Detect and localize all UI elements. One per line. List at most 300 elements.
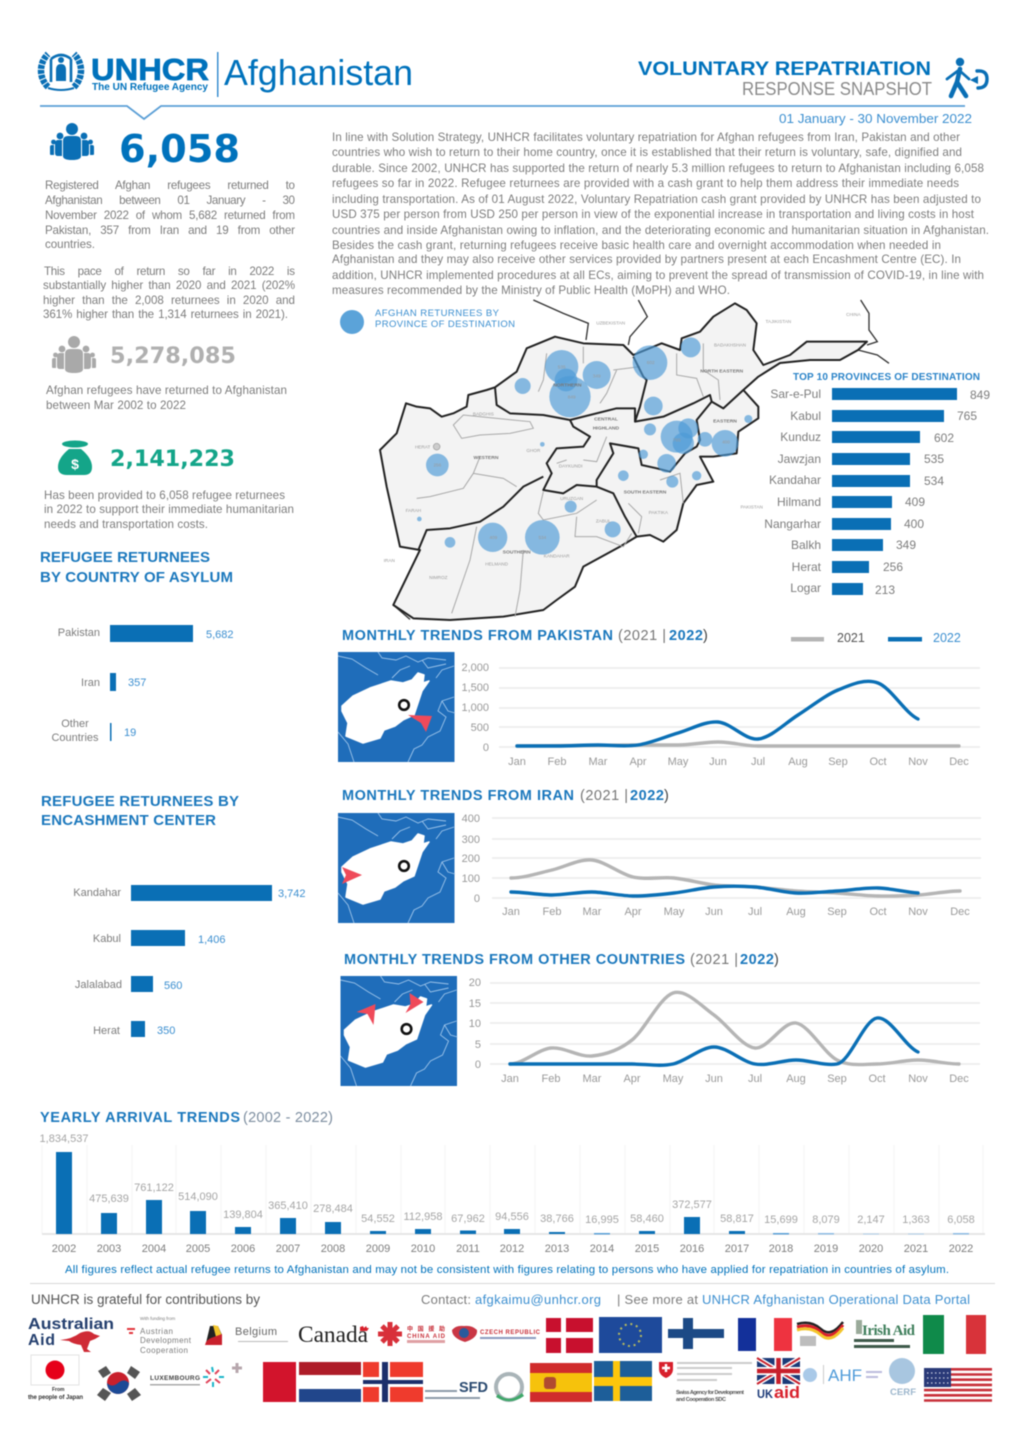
- bar: Kandahar: 3,742: [278, 888, 306, 900]
- value labels: 54,552: [361, 1213, 395, 1225]
- chart: Iran line chart: [462, 813, 981, 918]
- logo: Germany: [797, 1322, 843, 1346]
- chart: other countries line chart: Aug: [786, 1073, 806, 1085]
- chart: other countries line chart: Apr: [623, 1073, 641, 1085]
- map labels: 409: [489, 535, 498, 540]
- stat: 5,278,085 total returned: [46, 336, 287, 412]
- chart: Iran line chart: 0: [474, 893, 480, 905]
- logo: Czech Republic: CZECH REPUBLIC: [480, 1330, 541, 1336]
- panel: returnees by encashment center: [41, 793, 306, 1037]
- value labels: 58,817: [720, 1213, 754, 1225]
- chart: Iran line chart: Mar: [583, 906, 602, 918]
- logo: Austrian Development Cooperation: Development: [140, 1336, 192, 1345]
- text block: introduction: addition, UNHCR implemented procedures at all ECs, aiming to prevent the spread of transmission of COVID-19, in line with: [332, 269, 984, 282]
- year labels: 2018: [769, 1243, 793, 1255]
- logo: Japan: [28, 1355, 83, 1401]
- logo: Luxembourg: [150, 1367, 224, 1387]
- chart: Pakistan line chart: Apr: [629, 756, 647, 768]
- value labels: 1,363: [902, 1214, 930, 1226]
- report title: VOLUNTARY REPATRIATION: [638, 58, 931, 80]
- legend: 2021: [837, 631, 865, 645]
- values: 765: [957, 409, 977, 423]
- logo: Belgium: Belgium: [235, 1326, 277, 1338]
- province labels: Kandahar: [769, 473, 821, 487]
- bar: Herat: 350: [157, 1025, 175, 1037]
- heading: MONTHLY TRENDS FROM OTHER COUNTRIES: [344, 952, 685, 968]
- heading: YEARLY ARRIVAL TRENDS: [40, 1110, 240, 1126]
- chart: other countries line chart: Dec: [949, 1073, 969, 1085]
- date: 01 January - 30 November 2022: [779, 111, 972, 126]
- map: Iran route: [338, 813, 455, 923]
- value labels: 761,122: [134, 1182, 174, 1194]
- chart: Pakistan line chart: May: [668, 756, 689, 768]
- flag: Sweden: [594, 1361, 652, 1401]
- stat: 6,058 returnees: 6,058: [119, 127, 240, 171]
- chart: top 10 provinces of destination: [764, 372, 990, 597]
- values: 349: [896, 538, 916, 552]
- text block: introduction: including transportation. As of 01 August 2022, Voluntary Repatriation cash grant provided by UNHCR has been adjusted to: [332, 193, 981, 206]
- legend: map bubbles: AFGHAN RETURNEES BY: [375, 308, 500, 319]
- map labels: NIMROZ: [429, 575, 448, 580]
- chart: Iran line chart: Sep: [827, 906, 847, 918]
- value labels: 372,577: [672, 1199, 712, 1211]
- chart: Iran line chart: Jun: [705, 906, 723, 918]
- logo: China Aid: 中国援助: [407, 1325, 445, 1333]
- values: 213: [875, 583, 895, 597]
- logo wordmark: The UN Refugee Agency: [92, 82, 208, 93]
- value labels: 2,147: [857, 1214, 885, 1226]
- stat: 2,141,223 cash: Has been provided to 6,058 refugee returnees: [44, 489, 285, 502]
- chart: Pakistan line chart: Nov: [908, 756, 928, 768]
- chart: other countries line chart: 5: [475, 1039, 481, 1051]
- text block: introduction: countries who wish to return to their home country, once it is established that their return is voluntary, safe, dignified and: [332, 146, 962, 159]
- bar: Herat: Herat: [93, 1025, 120, 1037]
- province labels: Balkh: [791, 538, 821, 552]
- bar: Pakistan: Pakistan: [58, 627, 100, 639]
- chart: Iran line chart: Feb: [543, 906, 561, 918]
- chart: Pakistan line chart: 1,500: [461, 682, 489, 694]
- map labels: CENTRAL: [594, 417, 618, 423]
- chart: other countries line chart: Mar: [583, 1073, 602, 1085]
- stat: 2,141,223 cash: needs and transportation costs.: [44, 518, 208, 531]
- heading: (2021 |: [618, 628, 666, 644]
- text block: introduction: [332, 131, 989, 297]
- chart: other countries line chart: 15: [469, 998, 481, 1010]
- map labels: 849: [568, 394, 576, 399]
- province labels: Kabul: [790, 409, 821, 423]
- text block: introduction: countries and inside Afghanistan owing to inflation, and the deteriorating economic and humanitarian situation in Afghanistan.: [332, 224, 989, 237]
- map labels: UZBEKISTAN: [596, 321, 625, 326]
- map labels: BADGHIS: [473, 412, 494, 417]
- stat: 2,141,223 cash: 2,141,223: [110, 446, 235, 472]
- text block: registered returnees: November 2022 of whom 5,682 returned from: [45, 209, 295, 222]
- bar: Iran: Iran: [81, 677, 100, 689]
- heading: ): [664, 788, 669, 804]
- chart: Iran line chart: 200: [462, 853, 480, 865]
- values: 602: [934, 431, 954, 445]
- heading: 2022: [669, 628, 703, 644]
- province labels: Logar: [790, 581, 821, 595]
- chart: Pakistan line chart: Aug: [788, 756, 808, 768]
- map labels: 256: [433, 463, 442, 468]
- text block: registered returnees: higher than the 2,008 returnees in 2020 and: [43, 294, 295, 307]
- note: All figures reflect actual refugee returns to Afghanistan and may not be consistent with figures relating to persons who have applied for repatriation in countries of asylum.: [65, 1264, 949, 1276]
- value labels: 15,699: [764, 1214, 798, 1226]
- panel: yearly arrival trends: [40, 1110, 985, 1276]
- year labels: 2009: [366, 1243, 390, 1255]
- year labels: 2020: [859, 1243, 883, 1255]
- value labels: 8,079: [812, 1214, 840, 1226]
- logo: Australian Aid: Aid: [28, 1332, 55, 1349]
- province boundaries: [417, 343, 720, 617]
- heading: REFUGEE RETURNEES: [40, 549, 210, 566]
- chart: Pakistan line chart: Feb: [548, 756, 566, 768]
- year labels: 2019: [814, 1243, 838, 1255]
- heading: (2021 |: [580, 788, 628, 804]
- bars: [832, 388, 957, 595]
- heading: ): [703, 628, 708, 644]
- logo: Austrian Development Cooperation: With funding from: [140, 1316, 176, 1321]
- chart: Iran line chart: Aug: [786, 906, 806, 918]
- text block: registered returnees: Afghanistan between 01 January - 30: [45, 194, 295, 207]
- legend: 2022: [933, 631, 961, 645]
- values: 535: [924, 452, 944, 466]
- year labels: [52, 1243, 973, 1255]
- icon: UNHCR emblem: [41, 54, 81, 90]
- chart: other countries line chart: Jul: [748, 1073, 762, 1085]
- panel: monthly trends from other countries: [340, 952, 980, 1086]
- flag: Netherlands: [299, 1362, 361, 1402]
- stat: 5,278,085 total returned: between Mar 2002 to 2022: [46, 399, 186, 412]
- logo: Austrian Development Cooperation: Cooperation: [140, 1346, 188, 1355]
- year labels: 2015: [635, 1243, 659, 1255]
- text block: introduction: In line with Solution Strategy, UNHCR facilitates voluntary repatriation for Afghan refugees from Iran, Pakistan and other: [332, 131, 960, 144]
- chart: Iran line chart: Dec: [950, 906, 970, 918]
- chart: other countries line chart: 10: [469, 1018, 481, 1030]
- chart: Pakistan line chart: Jan: [508, 756, 526, 768]
- map labels: KANDAHAR: [544, 553, 570, 558]
- map labels: 602: [647, 360, 655, 365]
- bar: Kandahar: [73, 885, 306, 901]
- logo: Malta: [232, 1363, 242, 1373]
- text block: registered returnees: Registered Afghan refugees returned to: [45, 179, 295, 192]
- bar chart: yearly arrivals: [40, 1133, 985, 1255]
- value labels: 1,834,537: [40, 1133, 88, 1145]
- map labels: HERAT: [415, 444, 431, 449]
- flag: United States: [924, 1368, 992, 1402]
- province labels: Kunduz: [780, 430, 821, 444]
- chart: other countries line chart: Jun: [705, 1073, 723, 1085]
- logo: China Aid: [378, 1322, 446, 1346]
- header: [40, 52, 987, 126]
- icon: people grey: [52, 336, 96, 373]
- map labels: SOUTHERN: [503, 549, 531, 555]
- text block: registered returnees: [43, 179, 295, 321]
- value labels: 112,958: [404, 1211, 442, 1223]
- stat: 2,141,223 cash: [44, 440, 294, 531]
- chart: Pakistan line chart: 0: [483, 742, 489, 754]
- year labels: 2017: [725, 1243, 749, 1255]
- chart: Pakistan line chart: Jun: [709, 756, 727, 768]
- heading: MONTHLY TRENDS FROM PAKISTAN: [342, 628, 613, 644]
- chart: other countries line chart: 0: [475, 1059, 481, 1071]
- chart: Pakistan line chart: Mar: [589, 756, 608, 768]
- logo wordmark: UNHCR: [91, 52, 209, 87]
- panel: returnees by country of asylum: [40, 549, 234, 744]
- map labels: NORTH EASTERN: [700, 369, 744, 375]
- value labels: 139,804: [223, 1209, 263, 1221]
- map labels: HIGHLAND: [593, 425, 620, 431]
- chart: Iran line chart: 300: [462, 834, 480, 846]
- province labels: Hilmand: [777, 495, 821, 509]
- map labels: URUZGAN: [560, 496, 583, 501]
- map labels: IRAN: [384, 558, 395, 563]
- chart: Pakistan line chart: 1,000: [461, 702, 489, 714]
- bar: Jalalabad: [75, 976, 182, 992]
- chart: Pakistan line chart: Sep: [828, 756, 848, 768]
- panel: monthly trends from Pakistan: [338, 628, 980, 768]
- heading: TOP 10 PROVINCES OF DESTINATION: [793, 372, 980, 383]
- bar: Other countries: [51, 718, 136, 744]
- logo: Austrian Development Cooperation: Austrian: [140, 1327, 173, 1336]
- chart: Iran line chart: 100: [462, 873, 480, 885]
- flag: Norway: [363, 1362, 423, 1402]
- text block: introduction: Besides the cash grant, returning refugees receive basic health care and overnight accommodation when needed in: [332, 239, 941, 252]
- map labels: PAKTIKA: [649, 510, 669, 515]
- report title: RESPONSE SNAPSHOT: [742, 79, 932, 99]
- region boundaries: [418, 357, 743, 550]
- footer text: | See more at: [617, 1292, 698, 1307]
- bar: Kabul: [93, 930, 226, 946]
- flag: Finland: [668, 1318, 724, 1349]
- logo: Swiss Agency for Development: [659, 1362, 752, 1403]
- legend: map bubbles: PROVINCE OF DESTINATION: [375, 319, 515, 330]
- logo: UN AHF: [803, 1365, 882, 1385]
- map labels: 534: [538, 535, 547, 540]
- bar: Other countries: Countries: [51, 732, 99, 744]
- country title: Afghanistan: [224, 52, 413, 93]
- map labels: PAKISTAN: [740, 505, 763, 510]
- chart: other countries line chart: [469, 977, 980, 1085]
- year labels: 2013: [545, 1243, 569, 1255]
- map labels: [384, 312, 861, 580]
- icon: people: [50, 123, 94, 160]
- year labels: 2004: [142, 1243, 166, 1255]
- bar: Kabul: Kabul: [93, 933, 121, 945]
- chart: other countries line chart: 20: [469, 977, 481, 989]
- text block: introduction: USD 375 per person from USD 250 per person in view of the exponential increase in transportation and living costs in host: [332, 208, 975, 221]
- logo: UK aid: UK: [757, 1387, 773, 1401]
- year labels: 2006: [231, 1243, 255, 1255]
- neighbouring borders: [533, 300, 889, 363]
- map: Pakistan route: [338, 652, 455, 762]
- bar: Kandahar: Kandahar: [73, 887, 121, 899]
- footer rule: [30, 1283, 995, 1284]
- icon: money bag: [58, 440, 92, 475]
- bar: Other countries: Other: [61, 718, 89, 730]
- map labels: HELMAND: [485, 562, 509, 567]
- logo: CERF: [889, 1358, 916, 1398]
- map labels: CHINA: [846, 312, 861, 317]
- bar: Other countries: 19: [124, 727, 136, 739]
- chart: Iran line chart: Oct: [869, 906, 887, 918]
- footer text: UNHCR is grateful for contributions by: [31, 1292, 260, 1307]
- bar: Pakistan: [58, 625, 234, 642]
- chart: Pakistan line chart: Jul: [751, 756, 765, 768]
- heading: (2021 |: [690, 952, 738, 968]
- bar: Pakistan: 5,682: [206, 629, 234, 641]
- map labels: NORTHERN: [553, 383, 582, 389]
- logo: CERF: CERF: [890, 1387, 916, 1398]
- province labels: Sar-e-Pul: [770, 387, 821, 401]
- value labels: 514,090: [178, 1191, 218, 1203]
- flag: Monaco: [263, 1362, 296, 1402]
- chart: Pakistan line chart: 2,000: [461, 662, 489, 674]
- legend: [791, 631, 961, 645]
- logo: UK aid: [757, 1358, 800, 1402]
- panel: monthly trends from Iran: [338, 788, 981, 923]
- logo: Swiss Agency for Development: Swiss Agency for Development: [676, 1390, 744, 1396]
- chart: Iran line chart: Apr: [624, 906, 642, 918]
- heading: (2002 - 2022): [243, 1110, 333, 1126]
- legend: map bubbles: [340, 308, 515, 334]
- value labels: 278,484: [313, 1203, 353, 1215]
- values: 849: [970, 388, 990, 402]
- logo: Japan: the people of Japan: [28, 1395, 83, 1401]
- map labels: 400: [722, 439, 730, 444]
- flag: France: [738, 1318, 792, 1351]
- heading: ): [774, 952, 779, 968]
- value labels: 16,995: [585, 1214, 619, 1226]
- chart: Iran line chart: Nov: [908, 906, 928, 918]
- text block: registered returnees: substantially higher than 2020 and 2021 (202%: [43, 279, 295, 292]
- text block: introduction: refugees so far in 2022. Refugee returnees are provided with a cash grant to help them address their immediate needs: [332, 177, 959, 190]
- flag: Denmark: [546, 1318, 593, 1353]
- footer text: afgkaimu@unhcr.org: [475, 1292, 601, 1307]
- logo: Canada: Canada: [298, 1322, 368, 1347]
- logo: China Aid: CHINA AID: [407, 1334, 446, 1340]
- donor logos: [28, 1315, 992, 1403]
- stat: 5,278,085 total returned: 5,278,085: [110, 343, 236, 369]
- value labels: 6,058: [947, 1214, 975, 1226]
- map labels: EASTERN: [713, 419, 737, 425]
- map labels: DAYKUNDI: [559, 463, 583, 468]
- logo: Saudi Fund for Development: [425, 1374, 524, 1401]
- chart: other countries line chart: Jan: [501, 1073, 519, 1085]
- stat: 6,058 returnees: [43, 123, 295, 321]
- country land and outer border: [380, 303, 867, 620]
- flag: Spain: [530, 1363, 592, 1402]
- logo: Australian Aid: Australian: [28, 1316, 114, 1333]
- footer text: UNHCR Afghanistan Operational Data Portal: [702, 1292, 970, 1307]
- map: other countries routes: [340, 976, 458, 1086]
- year labels: 2016: [680, 1243, 704, 1255]
- chart: Iran line chart: 400: [462, 813, 480, 825]
- text block: introduction: measures recommended by the Ministry of Public Health (MoPH) and WHO.: [332, 284, 730, 297]
- heading: 2022: [630, 788, 664, 804]
- heading: REFUGEE RETURNEES BY: [41, 793, 239, 810]
- heading: 2022: [740, 952, 774, 968]
- values: 256: [883, 560, 903, 574]
- year labels: 2014: [590, 1243, 614, 1255]
- map labels: 535: [558, 364, 566, 369]
- year labels: 2021: [904, 1243, 928, 1255]
- map labels: WESTERN: [474, 455, 499, 461]
- logo: Korea: [97, 1366, 141, 1401]
- values: 534: [924, 474, 944, 488]
- bar: Herat: [93, 1021, 175, 1037]
- year labels: 2005: [186, 1243, 210, 1255]
- year labels: 2007: [276, 1243, 300, 1255]
- text block: introduction: durable. Since 2002, UNHCR has supported the return of nearly 5.3 million refugees to return to Afghanistan including 6,058: [332, 162, 984, 175]
- report title: [638, 58, 932, 99]
- chart: Pakistan line chart: Oct: [869, 756, 887, 768]
- chart: other countries line chart: Sep: [827, 1073, 847, 1085]
- bar: Kabul: 1,406: [198, 934, 226, 946]
- heading: BY COUNTRY OF ASYLUM: [40, 569, 233, 586]
- map labels: 349: [593, 373, 601, 378]
- logo: Australian Aid: [28, 1316, 114, 1352]
- logo: Irish Aid: [854, 1320, 916, 1348]
- chart: Iran line chart: May: [664, 906, 685, 918]
- chart: Pakistan line chart: [461, 662, 980, 768]
- heading: [40, 1110, 333, 1126]
- heading: MONTHLY TRENDS FROM IRAN: [342, 788, 574, 804]
- province labels: Nangarhar: [764, 517, 821, 531]
- map: returnees by province: [380, 300, 889, 620]
- map labels: FARAH: [406, 508, 421, 513]
- logo: Japan: From: [52, 1387, 65, 1393]
- logo: UN AHF: AHF: [828, 1366, 862, 1385]
- chart: Iran line chart: Jan: [502, 906, 520, 918]
- map labels: BADAKHSHAN: [714, 343, 746, 348]
- logo: Swiss Agency for Development: and Cooperation SDC: [676, 1397, 726, 1403]
- map labels: TAJIKISTAN: [765, 319, 791, 324]
- text block: introduction: Afghanistan and they may also receive other services provided by partners present at each Encashment Centre (EC). In: [332, 253, 961, 266]
- stat: 5,278,085 total returned: Afghan refugees have returned to Afghanistan: [46, 384, 287, 397]
- year labels: 2008: [321, 1243, 345, 1255]
- bar: Jalalabad: Jalalabad: [75, 979, 122, 991]
- chart: Pakistan line chart: Dec: [949, 756, 969, 768]
- chart: Iran line chart: Jul: [748, 906, 762, 918]
- text block: registered returnees: Pakistan, 357 from Iran and 19 from other: [45, 224, 295, 237]
- stat: 2,141,223 cash: in 2022 to support their immediate humanitarian: [44, 503, 294, 516]
- logo: Saudi Fund for Development: SFD: [459, 1379, 488, 1396]
- year labels: 2011: [456, 1243, 480, 1255]
- logo: Belgium: [205, 1325, 288, 1345]
- icon: money bag: $: [71, 456, 79, 472]
- footer text: [31, 1292, 970, 1307]
- logo: Luxembourg: LUXEMBOURG: [150, 1375, 200, 1382]
- province labels: [764, 387, 822, 595]
- value labels: 67,962: [451, 1213, 485, 1225]
- heading: [41, 793, 239, 829]
- map labels: SOUTH EASTERN: [624, 489, 667, 495]
- bar: Iran: [81, 673, 146, 691]
- chart: other countries line chart: Oct: [868, 1073, 886, 1085]
- chart: other countries line chart: May: [663, 1073, 684, 1085]
- map labels: GHOR: [526, 448, 541, 453]
- icon: person returning: [947, 58, 987, 96]
- values: 400: [904, 517, 924, 531]
- header rule: [40, 106, 965, 119]
- value labels: 58,460: [630, 1213, 664, 1225]
- year labels: 2012: [500, 1243, 524, 1255]
- chart: other countries line chart: Feb: [542, 1073, 560, 1085]
- year labels: 2002: [52, 1243, 76, 1255]
- value labels: [40, 1133, 975, 1226]
- bar: Jalalabad: 560: [164, 980, 182, 992]
